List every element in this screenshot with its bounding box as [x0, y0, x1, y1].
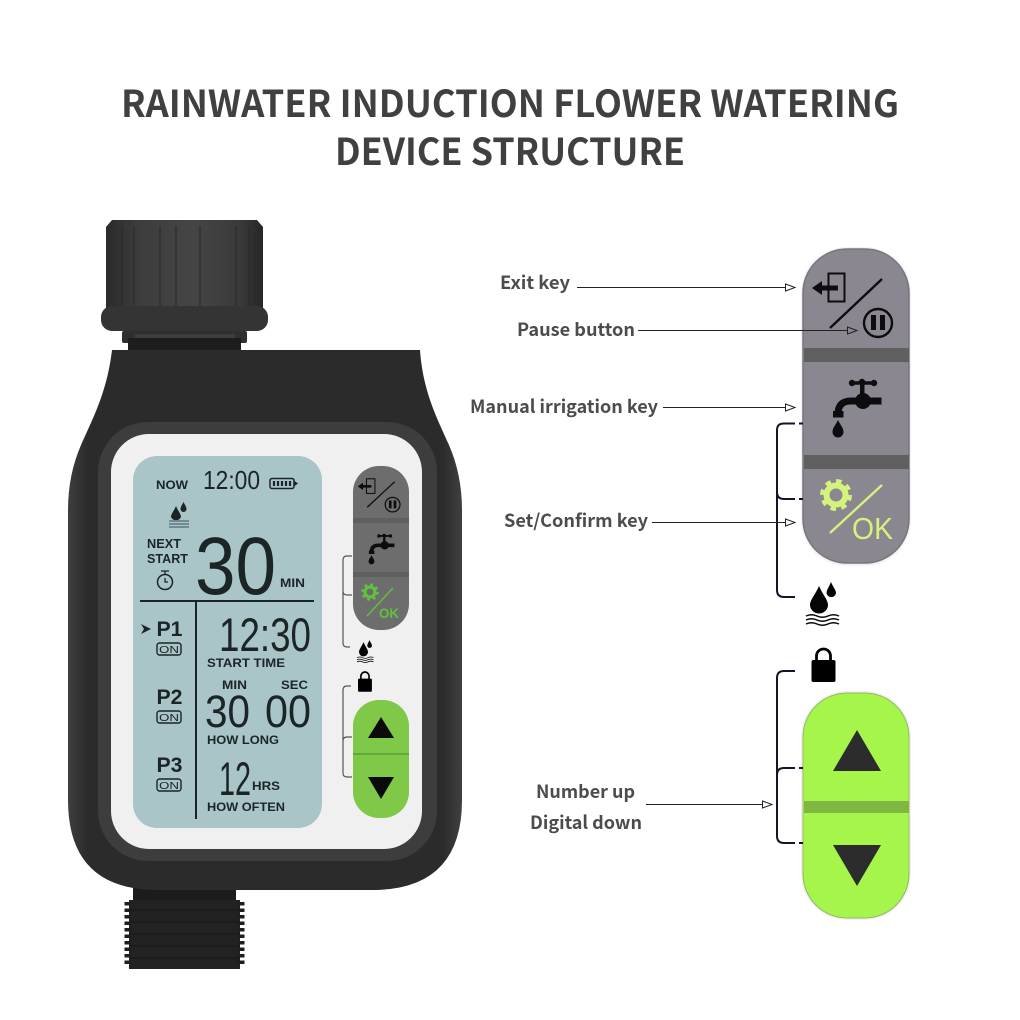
LCD: how long: HOW LONG: [207, 733, 279, 747]
device gear and OK icon: OK: [379, 605, 399, 621]
LCD: current time row: 12:00: [203, 465, 260, 495]
icon: gear and OK: [822, 481, 893, 546]
label: number up and digital down: Number up: [536, 778, 635, 804]
icon: faucet: [832, 379, 882, 438]
LCD: current time row: NOW: [156, 478, 189, 492]
icon: up arrow: [833, 730, 881, 771]
cap nut: [101, 220, 268, 331]
LCD: how often: [207, 752, 285, 814]
LCD: programs: ON: [159, 712, 179, 724]
title: RAINWATER INDUCTION FLOWER WATERING: [121, 74, 899, 128]
label: pause button: [517, 316, 857, 342]
panel: enlarged green arrow keys: [801, 691, 911, 920]
title: [121, 74, 899, 176]
LCD: programs: P2: [156, 686, 182, 709]
LCD: big countdown: 30: [195, 521, 276, 612]
device gear and OK icon: [362, 584, 399, 621]
device grey keypad: [353, 466, 409, 630]
label: set/confirm key: [504, 507, 795, 533]
label: set/confirm key: Set/Confirm key: [504, 507, 649, 533]
title: DEVICE STRUCTURE: [335, 122, 685, 176]
LCD: next start: START: [147, 552, 188, 566]
device icon: rain: [357, 640, 374, 662]
LCD: programs: [141, 618, 183, 792]
LCD: how long: 00: [265, 686, 311, 737]
panel: enlarged grey keypad: [801, 247, 911, 566]
LCD: start time: START TIME: [207, 656, 285, 670]
label: exit key: Exit key: [500, 269, 571, 295]
LCD: next start: NEXT: [147, 537, 181, 551]
LCD: current time row: [156, 465, 298, 495]
device: watering timer: [68, 220, 462, 969]
bezel: [98, 422, 437, 861]
white face plate: [111, 434, 422, 849]
housing: [68, 350, 462, 890]
icon: lock: [812, 649, 836, 682]
LCD: rain icon: [169, 502, 189, 527]
neck: [122, 331, 247, 352]
label: pause button: Pause button: [517, 316, 635, 342]
label: number up and digital down: Digital down: [530, 809, 642, 835]
LCD: how often: 12: [219, 752, 251, 805]
device bracket: rain sensor: [343, 556, 352, 647]
label: exit key: [500, 269, 795, 295]
LCD: how often: HOW OFTEN: [207, 800, 285, 814]
LCD: programs: ON: [159, 644, 179, 656]
icon: gear and OK: OK: [852, 511, 893, 546]
bracket: lower: [777, 671, 803, 843]
device green arrow keys: [353, 700, 409, 818]
LCD: how long: MIN: [222, 680, 247, 692]
label: manual irrigation key: Manual irrigation key: [470, 393, 659, 419]
label: number up and digital down: [530, 778, 772, 835]
threaded outlet: [128, 885, 241, 969]
icon: rain sensor: [806, 582, 839, 625]
LCD: big countdown: MIN: [280, 578, 305, 590]
LCD: how long: [205, 680, 311, 747]
LCD: programs: P1: [156, 618, 183, 641]
label: manual irrigation key: [470, 393, 795, 419]
device bracket: lock: [343, 686, 352, 777]
LCD: how long: SEC: [281, 680, 308, 692]
LCD: how often: HRS: [252, 781, 280, 793]
LCD: how long: 30: [205, 686, 250, 737]
LCD: start time: 12:30: [219, 608, 311, 661]
bracket: upper: [777, 424, 803, 597]
LCD: next start: [147, 537, 188, 590]
icon: exit and pause: [812, 274, 892, 337]
LCD: start time: [207, 608, 311, 670]
LCD screen: [133, 456, 322, 828]
LCD: programs: P3: [156, 754, 182, 777]
icon: down arrow: [833, 845, 881, 886]
LCD: programs: ON: [159, 780, 179, 792]
device icon: lock: [358, 672, 372, 692]
